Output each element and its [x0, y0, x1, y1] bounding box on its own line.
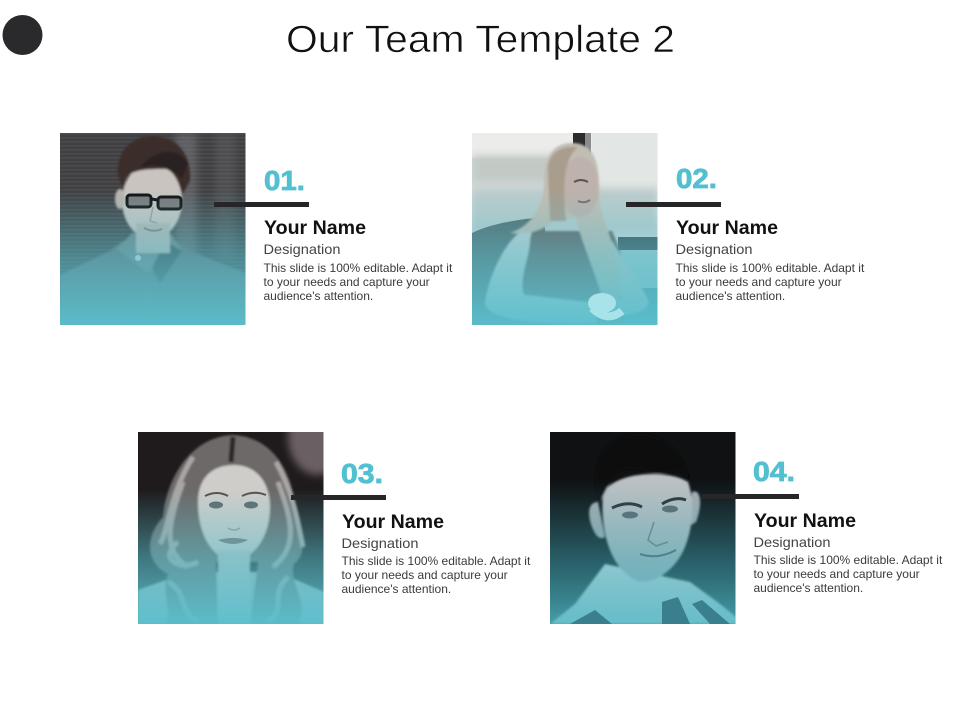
connector line [702, 494, 799, 499]
description: This slide is 100% editable. Adapt it [264, 261, 453, 275]
connector line [291, 495, 386, 500]
connector line [214, 202, 309, 207]
photo: man with glasses [60, 133, 246, 325]
description: audience's attention. [264, 289, 373, 303]
team member 02 [472, 133, 865, 325]
description: This slide is 100% editable. Adapt it [754, 553, 943, 567]
decorative dark circle [2, 15, 42, 55]
designation: Designation [342, 535, 418, 551]
number: 04. [753, 456, 795, 487]
photo: man in shirt and tie [550, 432, 736, 624]
number: 01. [264, 165, 305, 196]
name: Your Name [342, 512, 444, 533]
description: to your needs and capture your [342, 568, 508, 582]
description: This slide is 100% editable. Adapt it [676, 261, 865, 275]
team member 04 [550, 432, 943, 624]
name: Your Name [676, 218, 778, 239]
connector line [626, 202, 721, 207]
description: to your needs and capture your [676, 275, 842, 289]
title: Our Team Template 2 [286, 19, 675, 61]
team member 01 [60, 133, 453, 325]
description: to your needs and capture your [754, 567, 920, 581]
designation: Designation [676, 241, 752, 257]
photo: blonde woman by window [472, 133, 658, 325]
description: to your needs and capture your [264, 275, 430, 289]
designation: Designation [754, 534, 830, 550]
number: 02. [676, 163, 717, 194]
glasses [127, 195, 181, 209]
team member 03 [138, 432, 530, 624]
description: audience's attention. [754, 581, 863, 595]
description: audience's attention. [342, 582, 451, 596]
designation: Designation [264, 241, 340, 257]
description: This slide is 100% editable. Adapt it [342, 554, 531, 568]
photo: woman with curly hair [138, 432, 324, 624]
number: 03. [341, 458, 383, 489]
description: audience's attention. [676, 289, 785, 303]
name: Your Name [754, 511, 856, 532]
name: Your Name [264, 218, 366, 239]
